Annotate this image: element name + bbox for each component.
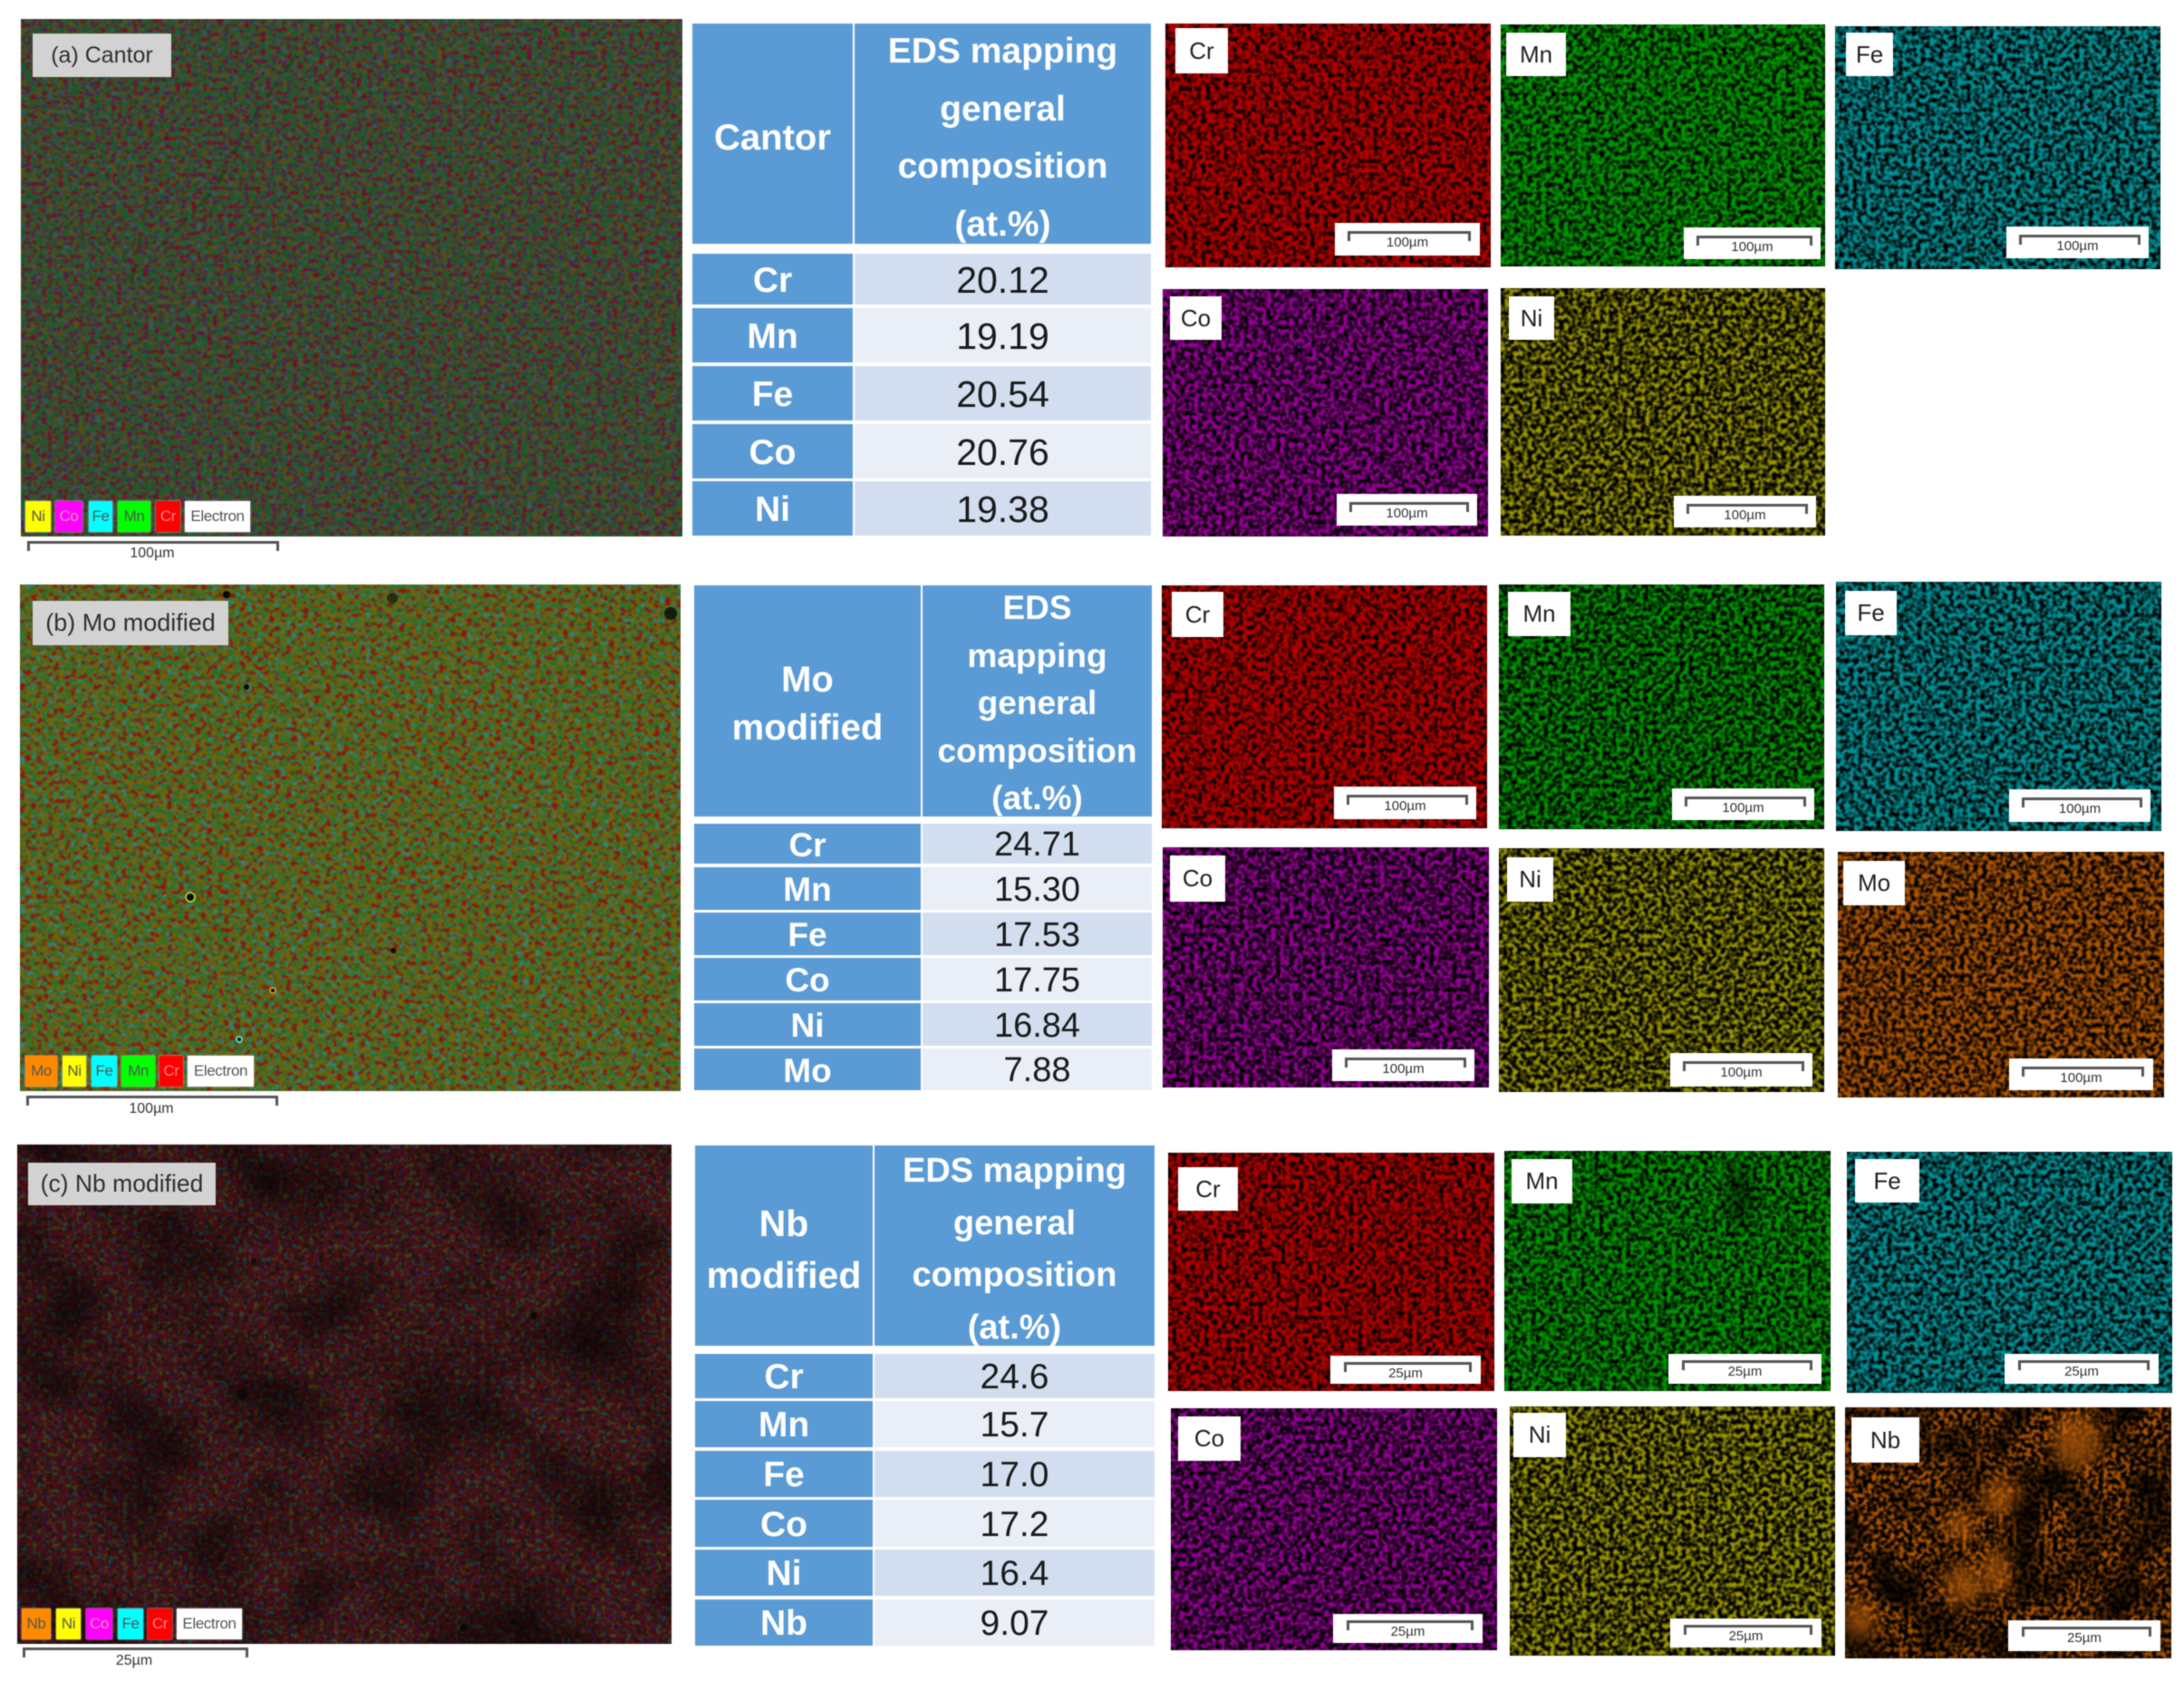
header: EDS mapping general composition: EDS mapping — [903, 1152, 1126, 1190]
map title: (c) Nb modified — [41, 1170, 203, 1197]
legend chip: Cr — [156, 501, 180, 532]
legend chip: Ni: Ni — [67, 1062, 82, 1079]
scale bar — [2006, 227, 2149, 258]
legend chip: Ni — [25, 501, 51, 532]
row: Mo — [694, 1048, 1152, 1090]
row: Mn: 19.19 — [956, 315, 1049, 357]
element label — [1512, 1159, 1572, 1203]
header: Mo modified — [694, 585, 921, 817]
element map: Mn (Cantor) — [1500, 24, 1826, 267]
row: Fe: 17.53 — [994, 915, 1080, 953]
panel: (b) Mo modified layered EDS map — [19, 584, 681, 1116]
map texture — [1847, 1152, 2172, 1393]
row: Ni — [694, 1003, 1152, 1046]
legend chip: Fe — [118, 1609, 143, 1639]
legend chip: Mn: Mn — [124, 507, 144, 525]
scale bar — [1670, 1619, 1822, 1648]
row: Ni: Ni — [755, 489, 790, 529]
element map: Fe (Cantor) — [1834, 25, 2161, 270]
row: Fe — [695, 1451, 1155, 1497]
element label: Mn — [1522, 600, 1556, 627]
legend chip: Fe: Fe — [121, 1615, 140, 1632]
table: Cantor composition — [691, 23, 1152, 536]
header: Nb modified: Nb — [759, 1203, 808, 1244]
row: Fe — [694, 913, 1152, 955]
element label: Fe — [1873, 1167, 1901, 1194]
element label: Ni — [1521, 304, 1542, 332]
scale label: 100µm — [130, 546, 175, 561]
map title — [33, 34, 171, 77]
scale bar: 25µm — [1388, 1366, 1423, 1381]
map texture — [1168, 1153, 1494, 1391]
scale bar — [1672, 788, 1814, 820]
scale bar — [1674, 496, 1816, 527]
scale bar: 100µm — [2056, 238, 2099, 254]
row: Ni: 16.4 — [981, 1554, 1049, 1593]
scale bar — [1333, 1614, 1483, 1643]
map texture — [1834, 25, 2161, 270]
header: EDS mapping general composition: (at.%) — [968, 1309, 1061, 1347]
header: EDS mapping general composition: general — [940, 90, 1066, 129]
map texture — [1500, 24, 1826, 267]
legend chip: Fe — [89, 501, 112, 532]
legend chip: Fe: Fe — [92, 507, 110, 525]
header: Mo modified: modified — [732, 707, 883, 747]
row: Co: 17.75 — [994, 961, 1080, 999]
row: Co: Co — [749, 433, 796, 471]
scale bar — [2008, 1620, 2160, 1651]
legend chip: Electron — [188, 1056, 254, 1087]
element label: Mo — [1858, 869, 1890, 896]
row: Nb: Nb — [760, 1604, 807, 1643]
legend chip: Nb — [22, 1609, 51, 1639]
row: Co — [695, 1500, 1155, 1547]
header: EDS mapping general composition: composition — [913, 1256, 1116, 1294]
header: Mo modified: Mo — [781, 660, 834, 700]
legend chip: Cr: Cr — [160, 507, 176, 525]
row: Mo: Mo — [783, 1051, 832, 1089]
scale bar: 100µm — [1386, 506, 1428, 521]
scale bar — [23, 1648, 248, 1657]
map texture — [1162, 288, 1489, 537]
map texture — [1845, 1407, 2171, 1658]
element label — [1172, 592, 1223, 637]
row: Co: 17.2 — [981, 1504, 1049, 1544]
scale bar — [2005, 1354, 2159, 1384]
layered map image — [17, 1145, 672, 1644]
header: Cantor — [692, 24, 853, 244]
element map: Co (Cantor) — [1162, 288, 1489, 537]
scale bar: 100µm — [1387, 235, 1428, 250]
scale label: 100µm — [129, 1101, 174, 1116]
map texture — [1500, 287, 1826, 536]
legend chip: Mn — [118, 501, 150, 532]
scale bar — [2009, 1058, 2153, 1090]
row: Cr — [691, 253, 1151, 305]
scale bar — [1330, 1356, 1481, 1384]
scale bar — [1670, 1053, 1812, 1087]
scale bar — [1332, 1049, 1474, 1081]
legend chip: Fe — [92, 1056, 117, 1087]
row: Nb: 9.07 — [981, 1604, 1049, 1643]
element label: Ni — [1529, 1421, 1551, 1448]
panel: (c) Nb modified layered EDS map — [17, 1145, 672, 1672]
row: Cr: Cr — [764, 1358, 804, 1396]
layered map image — [20, 18, 683, 537]
header: EDS mapping general composition: composition — [898, 147, 1107, 186]
row: Ni — [695, 1550, 1155, 1596]
scale bar — [1334, 787, 1476, 819]
map texture — [1838, 852, 2164, 1097]
legend chip: Co — [86, 1609, 112, 1639]
row: Cr — [695, 1354, 1155, 1398]
scale label: 25µm — [116, 1653, 152, 1668]
legend chip: Cr — [159, 1056, 183, 1087]
row: Mn — [695, 1401, 1155, 1447]
element label: Fe — [1856, 40, 1883, 67]
map texture — [1504, 1151, 1831, 1391]
row: Cr — [693, 823, 1153, 865]
legend chip: Ni — [63, 1056, 86, 1087]
row: Cr: 24.6 — [981, 1358, 1049, 1396]
element label: Cr — [1195, 1174, 1221, 1202]
scale bar: 25µm — [1729, 1628, 1763, 1644]
element label: Co — [1194, 1425, 1224, 1452]
element label — [1178, 1167, 1238, 1211]
scale bar: 25µm — [1728, 1364, 1762, 1379]
element map: Fe (Mo modified) — [1836, 582, 2161, 831]
header: EDS mapping general composition: general — [978, 684, 1097, 721]
row: Cr: 20.12 — [956, 259, 1049, 301]
scale bar — [2009, 789, 2150, 822]
element label — [1509, 296, 1554, 340]
header: Nb modified — [695, 1145, 873, 1346]
legend chip: Cr: Cr — [152, 1615, 168, 1632]
row: Ni: 19.38 — [956, 488, 1049, 530]
element label — [1845, 591, 1897, 635]
row: Fe: 20.54 — [956, 373, 1049, 415]
row: Co: Co — [760, 1504, 807, 1544]
element map: Ni (Cantor) — [1500, 287, 1826, 536]
legend chip: Ni: Ni — [62, 1615, 75, 1632]
element label — [1846, 33, 1893, 76]
scale bar: 25µm — [2064, 1364, 2099, 1379]
scale bar: 100µm — [1722, 800, 1764, 816]
element label — [1507, 857, 1553, 902]
row: Ni: 16.84 — [994, 1006, 1080, 1044]
legend chip: Electron: Electron — [182, 1615, 237, 1632]
row: Co — [691, 423, 1151, 479]
legend chip: Co: Co — [90, 1615, 109, 1632]
layered map image — [19, 584, 681, 1092]
scale bar — [27, 541, 279, 551]
element map: Cr (Cantor) — [1164, 23, 1492, 268]
legend chip: Mn — [121, 1056, 155, 1087]
element map: Ni (Mo modified) — [1499, 848, 1824, 1092]
header: EDS mapping general composition — [923, 585, 1152, 817]
element label — [1508, 592, 1570, 636]
element label — [1851, 1417, 1919, 1463]
row: Cr: 24.71 — [994, 826, 1080, 864]
element label: Nb — [1870, 1426, 1900, 1454]
header: EDS mapping general composition: mapping — [967, 636, 1107, 674]
legend chip: Electron — [185, 501, 250, 532]
element map: Ni (Nb modified) — [1510, 1406, 1835, 1656]
legend chip: Co — [55, 501, 82, 532]
row: Cr: Cr — [753, 261, 792, 299]
scale bar — [1337, 494, 1477, 526]
header: EDS mapping general composition: general — [953, 1203, 1076, 1242]
element map: Fe (Nb modified) — [1847, 1152, 2172, 1393]
map title — [28, 1163, 216, 1205]
element map: Nb — [1845, 1407, 2171, 1658]
map title: (a) Cantor — [51, 42, 153, 67]
element map: Mn (Nb modified) — [1504, 1151, 1831, 1391]
header: EDS mapping general composition — [855, 24, 1151, 244]
table: Mo modified composition — [693, 585, 1153, 1091]
element label: Co — [1183, 865, 1213, 892]
map texture — [1162, 585, 1487, 828]
scale bar: 100µm — [2060, 1070, 2102, 1086]
legend chip: Co: Co — [60, 507, 78, 525]
element map: Co (Nb modified) — [1171, 1408, 1497, 1650]
map texture — [1510, 1406, 1835, 1656]
row: Ni: Ni — [767, 1554, 801, 1593]
scale bar — [1684, 227, 1821, 259]
row: Cr: Cr — [788, 826, 826, 863]
header: EDS mapping general composition: (at.%) — [954, 205, 1051, 244]
header: EDS mapping general composition — [875, 1145, 1155, 1346]
row: Fe: Fe — [788, 916, 827, 953]
row: Mn — [691, 307, 1151, 363]
legend chip: Fe: Fe — [95, 1062, 113, 1079]
element label — [1170, 855, 1225, 902]
element label: Co — [1181, 304, 1211, 332]
legend chip: Electron: Electron — [190, 507, 245, 525]
header: Cantor: Cantor — [714, 118, 831, 158]
scale bar: 100µm — [2059, 801, 2101, 817]
legend chip: Mo — [25, 1056, 57, 1087]
header: EDS mapping general composition: EDS — [1002, 589, 1072, 626]
map texture — [1499, 585, 1824, 829]
element label — [1513, 1413, 1566, 1457]
element label — [1855, 1159, 1919, 1203]
legend chip: Electron — [177, 1609, 242, 1639]
map texture — [1836, 582, 2161, 831]
map texture — [1163, 847, 1489, 1087]
scale bar: 100µm — [1720, 1065, 1763, 1080]
element label — [1506, 33, 1566, 76]
row: Co: 20.76 — [956, 431, 1049, 473]
row: Ni: Ni — [790, 1007, 825, 1044]
row: Fe: Fe — [763, 1455, 805, 1494]
element label — [1843, 861, 1905, 905]
header: EDS mapping general composition: (at.%) — [991, 779, 1083, 817]
element map: Cr (Mo modified) — [1162, 585, 1487, 828]
element label — [1178, 1416, 1241, 1461]
element map: Mo — [1838, 852, 2164, 1097]
legend chip: Electron: Electron — [194, 1062, 247, 1079]
row: Mn: Mn — [747, 317, 798, 355]
map title: (b) Mo modified — [45, 609, 216, 636]
map texture — [1171, 1408, 1497, 1650]
row: Ni — [691, 480, 1151, 536]
scale bar — [1335, 223, 1480, 256]
legend chip: Mn: Mn — [128, 1062, 149, 1079]
element label: Ni — [1519, 865, 1541, 893]
legend chip: Cr — [148, 1609, 172, 1639]
scale bar: 100µm — [1384, 798, 1426, 814]
map title — [33, 601, 228, 645]
element label — [1170, 296, 1222, 340]
row: Mn: 15.7 — [981, 1406, 1049, 1445]
header: EDS mapping general composition: EDS mapping — [888, 32, 1117, 71]
scale bar: 100µm — [1724, 507, 1766, 523]
element label: Cr — [1185, 600, 1210, 627]
element map: Cr (Nb modified) — [1168, 1153, 1494, 1391]
row: Co: Co — [785, 961, 830, 999]
element label — [1175, 28, 1228, 73]
scale bar: 100µm — [1731, 239, 1773, 255]
scale bar: 25µm — [2067, 1630, 2102, 1646]
header: Nb modified: modified — [707, 1254, 861, 1296]
row: Mn: Mn — [759, 1406, 809, 1445]
element label: Mn — [1525, 1167, 1559, 1194]
element label: Mn — [1520, 40, 1552, 67]
element map: Co (Mo modified) — [1163, 847, 1489, 1087]
panel: (a) Cantor layered EDS map — [20, 18, 683, 562]
row: Mn: Mn — [783, 871, 832, 908]
row: Fe: Fe — [752, 375, 793, 413]
row: Nb — [695, 1599, 1155, 1646]
row: Co — [694, 958, 1152, 1000]
legend chip: Ni — [56, 1609, 81, 1639]
table: Nb modified composition — [695, 1145, 1155, 1646]
scale bar — [1668, 1354, 1822, 1384]
row: Mn — [694, 867, 1152, 910]
row: Fe: 17.0 — [981, 1455, 1049, 1494]
legend chip: Mo: Mo — [31, 1062, 52, 1079]
scale bar — [26, 1096, 278, 1106]
map texture — [1499, 848, 1824, 1092]
element map: Mn (Mo modified) — [1499, 585, 1824, 829]
row: Mo: 7.88 — [1004, 1051, 1070, 1089]
element label: Cr — [1189, 36, 1214, 63]
legend chip: Nb: Nb — [27, 1615, 45, 1632]
row: Fe — [691, 365, 1151, 421]
row: Mn: 15.30 — [994, 870, 1080, 908]
element label: Fe — [1857, 599, 1885, 626]
scale bar: 100µm — [1382, 1061, 1425, 1077]
header: EDS mapping general composition: composition — [938, 732, 1136, 768]
legend chip: Ni: Ni — [31, 507, 45, 525]
scale bar: 25µm — [1391, 1624, 1425, 1639]
map texture — [1164, 23, 1492, 268]
legend chip: Cr: Cr — [163, 1062, 179, 1079]
